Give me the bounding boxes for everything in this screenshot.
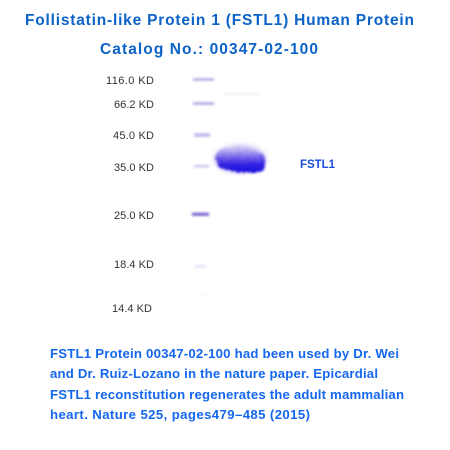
molecular weight labels: 18.4 KD: [114, 259, 154, 271]
molecular weight labels: 66.2 KD: [114, 99, 154, 111]
FSTL1 band label: FSTL1: [300, 159, 336, 171]
molecular weight labels: 35.0 KD: [114, 162, 154, 174]
molecular weight labels: 25.0 KD: [114, 210, 154, 222]
description text: FSTL1 reconstitution regenerates the adult mammalian: [50, 387, 404, 402]
title: Follistatin-like Protein 1 (FSTL1) Human Protein: [25, 12, 414, 29]
description text: heart. Nature 525, pages479–485 (2015): [50, 407, 310, 422]
molecular weight labels: 14.4 KD: [112, 303, 152, 315]
description text: [50, 346, 404, 422]
molecular weight labels: [106, 75, 154, 315]
description text: FSTL1 Protein 00347-02-100 had been used by Dr. Wei: [50, 346, 399, 361]
molecular weight labels: 45.0 KD: [113, 130, 154, 142]
title: [25, 12, 414, 58]
FSTL1 protein band: [214, 145, 266, 173]
faint upper band: [223, 93, 259, 96]
marker ladder bands: [192, 78, 214, 296]
description text: and Dr. Ruiz-Lozano in the nature paper. Epicardial: [50, 366, 378, 381]
gel image: [192, 78, 266, 296]
molecular weight labels: 116.0 KD: [106, 75, 154, 87]
title: Catalog No.: 00347-02-100: [100, 41, 318, 58]
